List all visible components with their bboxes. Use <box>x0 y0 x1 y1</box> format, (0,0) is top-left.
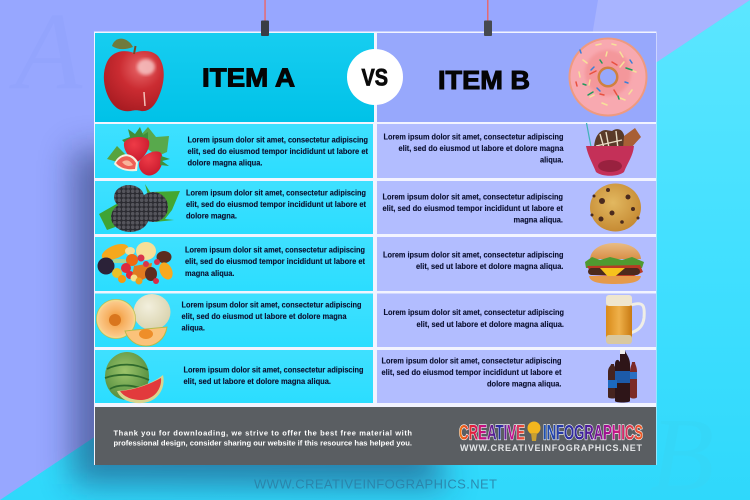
row A4: melon <box>95 294 373 347</box>
text block: Lorem ipsum dolor sit amet, consectetur adipiscing <box>188 136 368 144</box>
text block: elit, sed do eiusmod tempor incididunt ut labore et <box>188 147 368 156</box>
panel: item A header <box>95 33 374 122</box>
icon: burger <box>585 243 644 284</box>
hanging clip left <box>261 0 269 36</box>
text block: dolore magna aliqua. <box>487 380 562 388</box>
row A2: blackberries <box>95 181 373 234</box>
text block <box>186 188 366 220</box>
website caption: WWW.CREATIVEINFOGRAPHICS.NET <box>254 476 497 492</box>
logo: WWW.CREATIVEINFOGRAPHICS.NET <box>460 443 642 453</box>
text block: Lorem ipsum dolor sit amet, consectetur adipiscing <box>182 300 362 310</box>
text block: Lorem ipsum dolor sit amet, consectetur adipiscing <box>382 192 563 202</box>
text block: elit, sed do eiusmod tempor incididunt ut labore et <box>185 257 365 266</box>
text block: elit, sed ut labore et dolore magna aliqua. <box>416 320 564 329</box>
icon: beer mug <box>606 295 644 344</box>
icon: blackberries <box>99 184 180 232</box>
badge: VS: VS <box>362 64 388 92</box>
icon: dried fruit <box>98 241 175 284</box>
text block: elit, sed ut labore et dolore magna aliqua. <box>416 262 564 271</box>
icon: cookie <box>590 184 641 232</box>
row A5: watermelon <box>95 350 373 403</box>
text block: Lorem ipsum dolor sit amet, consectetur adipiscing <box>383 250 564 260</box>
hanging clip right <box>484 0 492 36</box>
logo: CREATIVE <box>459 422 525 444</box>
text block <box>182 300 362 332</box>
row B1: ice cream cup <box>377 123 656 178</box>
text block: Lorem ipsum dolor sit amet, consectetur adipiscing <box>184 366 364 374</box>
icon: dessert cup <box>586 123 641 176</box>
text block <box>382 192 563 224</box>
panel: comparison sheet <box>94 32 656 465</box>
text block: dolore magna. <box>186 212 237 220</box>
text block: magna aliqua. <box>185 269 234 278</box>
text block: aliqua. <box>540 156 564 164</box>
text block: elit, sed do eiusmod ut labore et dolore magna <box>398 144 564 153</box>
text block <box>384 308 564 329</box>
text block <box>382 356 562 388</box>
text block: elit, sed do eiusmod tempor incididunt ut labore et <box>186 200 366 209</box>
footer <box>95 407 656 465</box>
row A1: strawberries <box>95 124 373 178</box>
text block <box>185 246 365 278</box>
text block: elit, sed do eiusmod ut labore et dolore magna <box>182 312 347 321</box>
row B2: cookie <box>377 181 656 234</box>
row B5: soda <box>377 350 656 403</box>
text block: aliqua. <box>182 324 205 332</box>
text block: elit, sed ut labore et dolore magna aliqua. <box>184 377 331 386</box>
text block <box>383 250 564 271</box>
text block: dolore magna aliqua. <box>188 158 262 168</box>
text block: Lorem ipsum dolor sit amet, consectetur adipiscing <box>384 132 564 142</box>
text block <box>188 136 368 168</box>
divider <box>374 33 377 407</box>
thank-you note <box>114 428 412 448</box>
icon: strawberries <box>107 127 170 176</box>
text block: Lorem ipsum dolor sit amet, consectetur adipiscing <box>384 308 564 317</box>
badge: VS <box>347 49 403 105</box>
text block: Lorem ipsum dolor sit amet, consectetur adipiscing <box>186 188 366 198</box>
text block: elit, sed do eiusmod tempor incididunt ut labore et <box>382 204 563 213</box>
icon: melons <box>96 294 170 346</box>
row B4: beer <box>377 294 656 347</box>
row A3: mixed fruit <box>95 237 373 291</box>
text block <box>384 132 564 164</box>
logo: INFOGRAPHICS <box>543 422 643 444</box>
icon: light bulb <box>528 422 540 441</box>
text block: magna aliqua. <box>514 216 563 224</box>
row B3: burger <box>377 237 656 291</box>
text block: elit, sed do eiusmod tempor incididunt ut labore et <box>382 368 562 377</box>
icon: soda bottles <box>608 350 637 402</box>
icon: apple <box>104 39 164 111</box>
heading: item A: ITEM A <box>202 62 295 92</box>
thank-you note: Thank you for downloading, we strive to offer the best free material with <box>114 428 412 438</box>
icon: donut <box>568 38 648 116</box>
thank-you note: professional design, consider sharing our website if this resource has helped you. <box>114 438 412 448</box>
heading: item B: ITEM B <box>438 65 530 95</box>
text block: Lorem ipsum dolor sit amet, consectetur adipiscing <box>382 356 562 366</box>
icon: watermelon <box>105 352 164 403</box>
text block <box>184 366 364 386</box>
logo <box>459 422 643 453</box>
text block: Lorem ipsum dolor sit amet, consectetur adipiscing <box>185 246 365 254</box>
panel: item B header <box>377 33 656 122</box>
